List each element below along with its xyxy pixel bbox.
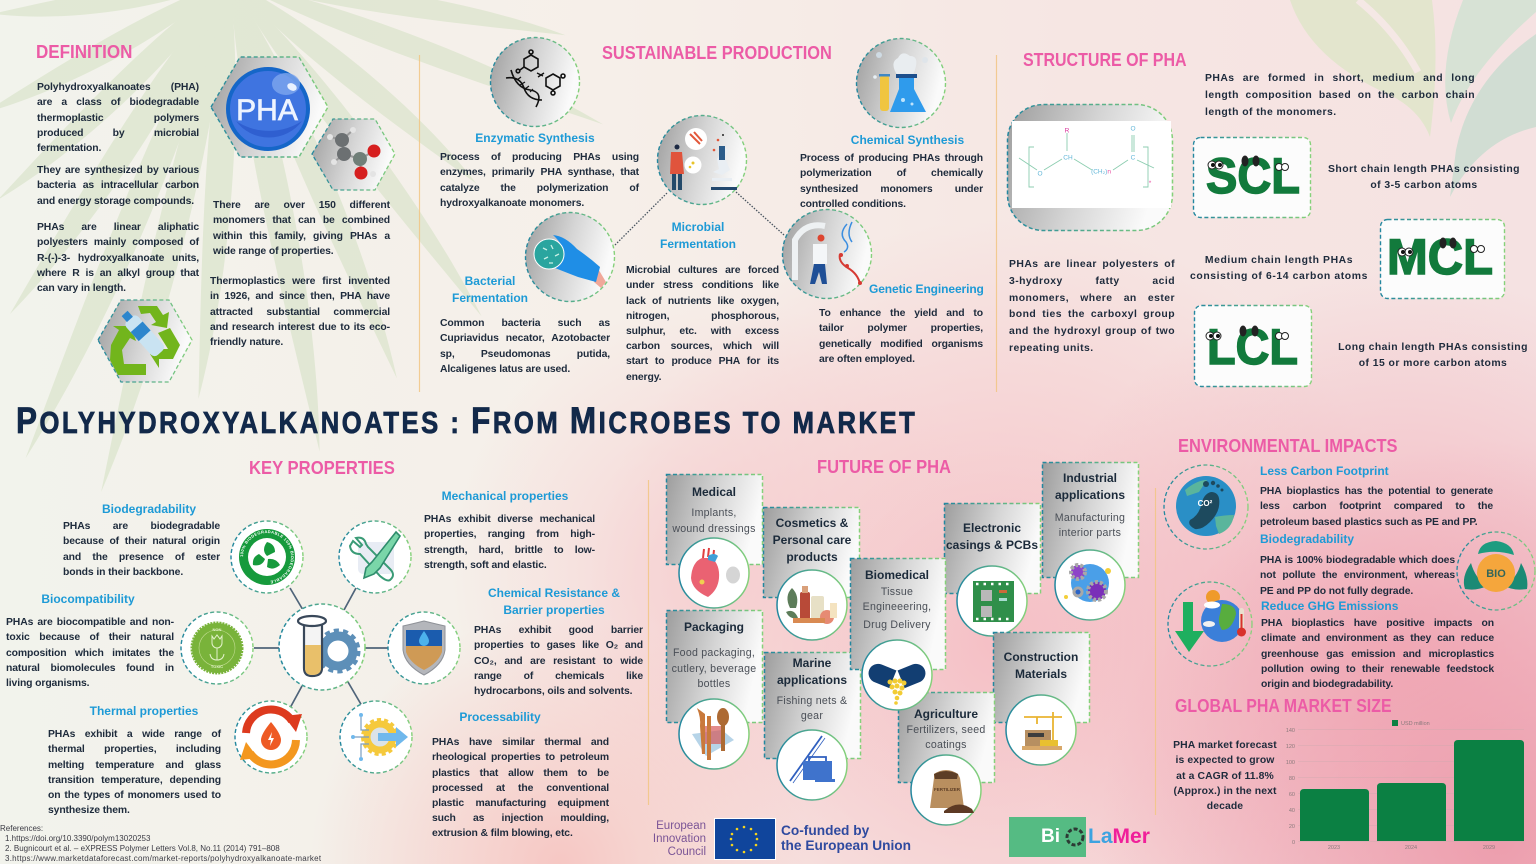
- card: MCL: [1380, 220, 1504, 298]
- card: SCL: [1194, 138, 1310, 218]
- text: genetic engineering: tailor polymer properties,: [819, 323, 983, 334]
- card: marine: gear: [801, 710, 823, 722]
- text: genetic engineering: [819, 308, 983, 365]
- text: definition paragraph 2: [37, 165, 199, 207]
- card: industrial: Manufacturing: [1055, 512, 1125, 524]
- card: construction: Materials: [1015, 667, 1067, 681]
- text: thermal properties: on the types of monomers used to: [48, 790, 221, 801]
- text: thermoplastics history: attracted substantial commercial: [210, 307, 390, 318]
- references: 2. Bugnicourt et al. – eXPRESS Polymer Letters Vol.8, No.11 (2014) 791–808: [5, 844, 280, 853]
- text: enzymatic synthesis: [440, 152, 640, 209]
- card: biomedical: Tissue: [881, 586, 913, 598]
- text: linear polyesters: repeating units.: [1009, 343, 1094, 354]
- text: linear polyesters: PHAs are linear polyesters of: [1009, 259, 1175, 270]
- subheading: enzymatic synthesis: Enzymatic Synthesis: [475, 131, 595, 145]
- card: construction: [994, 632, 1090, 765]
- text: linear polyesters: [1009, 259, 1175, 354]
- text: less carbon footprint: [1260, 486, 1493, 528]
- card: packaging: cutlery, beverage: [672, 663, 756, 675]
- text: definition paragraph 1: [37, 82, 199, 154]
- logo: BioLaMer: Bi: [1041, 826, 1060, 847]
- icon: bacterial fermentation: [526, 212, 614, 302]
- text: LCL description: of 15 or more carbon atoms: [1359, 358, 1507, 369]
- text: microbial fermentation: Microbial cultures are forced: [626, 265, 779, 276]
- icon: carbon footprint: CO²: [1198, 499, 1213, 508]
- text: processability: processed at the conventional: [432, 783, 609, 794]
- text: definition paragraph 3: [37, 222, 200, 294]
- text: market forecast: is expected to grow: [1176, 755, 1274, 766]
- text: MCL description: Medium chain length PHAs: [1205, 255, 1353, 266]
- text: thermoplastics history: in 1926, and since then, PHA have: [210, 291, 390, 302]
- text: less carbon footprint: petroleum based plastics such as PE and PP.: [1260, 517, 1478, 528]
- logo: BioLaMer: [1009, 817, 1154, 857]
- bar chart: 140: [1286, 728, 1295, 734]
- text: biocompatibility: composition which imitates the: [6, 648, 174, 659]
- subheading: biocompatibility: Biocompatibility: [41, 592, 135, 606]
- icon: enzymatic synthesis: [490, 38, 580, 126]
- text: thermal properties: thermal properties, including: [48, 744, 221, 755]
- subheading: microbial fermentation: Microbial: [672, 220, 724, 234]
- card: construction: Construction: [1004, 650, 1078, 664]
- icon: PHA hexagon: [211, 57, 328, 157]
- heading: future of PHA: FUTURE OF PHA: [817, 456, 951, 477]
- text: thermal properties: [48, 729, 222, 816]
- card: agriculture: [898, 692, 994, 825]
- diagram: PHA chemical structure: O: [1130, 126, 1136, 132]
- text: processability: PHAs have similar thermal and: [432, 737, 609, 748]
- text: definition paragraph 3: R-(-)-3- hydroxyalkanoate units,: [37, 253, 199, 264]
- text: mechanical properties: strength, hard, brittle to low-: [424, 545, 595, 556]
- bar chart: USD million: [1401, 721, 1430, 727]
- text: thermoplastics history: friendly nature.: [210, 337, 283, 348]
- card: electronic: [944, 504, 1040, 636]
- diagram: PHA chemical structure: [1008, 104, 1172, 230]
- text: chemical resistance: hydrocarbons, oils and solvents.: [474, 686, 632, 697]
- diagram: PHA chemical structure: *: [1149, 180, 1152, 187]
- bar chart: 60: [1289, 792, 1295, 798]
- icon: processability gear: [340, 701, 412, 773]
- icon: central hub: [279, 604, 365, 690]
- text: reduce GHG emissions: origin and biodegradability.: [1261, 679, 1393, 690]
- text: chemical synthesis: [800, 153, 984, 210]
- text: biodegradability: [63, 521, 220, 578]
- background: palm leaf: [0, 0, 610, 498]
- text: monomers: within this family, giving PHAs a: [213, 231, 390, 242]
- card: industrial: [1042, 462, 1138, 620]
- icon: microbial fermentation: [658, 116, 746, 204]
- logo: co-funded text: [781, 823, 916, 853]
- text: chain length intro: length composition based on the carbon chain: [1205, 90, 1475, 101]
- text: genetic engineering: genetically modified organisms: [819, 339, 983, 350]
- text: market forecast: at a CAGR of 11.8%: [1176, 771, 1274, 782]
- text: market forecast: (Approx.) in the next: [1173, 786, 1277, 797]
- text: linear polyesters: and the hydroxyl group of two: [1009, 326, 1175, 337]
- panel: environmental impacts: [1163, 435, 1536, 690]
- bar chart: 20: [1289, 824, 1295, 830]
- subheading: chemical synthesis: Chemical Synthesis: [851, 133, 964, 147]
- card: agriculture: FERTILIZER: [934, 787, 961, 792]
- text: microbial fermentation: start to produce PHA for its: [626, 356, 779, 367]
- text: bacterial fermentation: Alcaligenes latus are used.: [440, 364, 570, 375]
- text: bacterial fermentation: Common bacteria such as: [440, 318, 610, 329]
- text: mechanical properties: properties, ranging from high-: [424, 529, 595, 540]
- text: thermoplastics history: [210, 276, 390, 348]
- subheading: microbial fermentation: Fermentation: [660, 236, 736, 250]
- text: thermoplastics history: Thermoplastics were first invented: [210, 276, 390, 287]
- card: LCL: LCL: [1207, 319, 1298, 375]
- heading: global market: GLOBAL PHA MARKET SIZE: [1175, 695, 1392, 716]
- references: 1.https://doi.org/10.3390/polym13020253: [5, 834, 150, 843]
- logo: European Innovation Council: [653, 820, 706, 858]
- icon: carbon footprint: [1164, 465, 1248, 549]
- text: market forecast: [1173, 740, 1277, 812]
- text: processability: such as injection moulding,: [432, 813, 609, 824]
- text: genetic engineering: To enhance the yield and to: [819, 308, 983, 319]
- text: chemical resistance: CO₂, and are resistant to wide: [474, 656, 643, 667]
- bar chart: [1286, 720, 1524, 851]
- text: definition paragraph 1: produced by microbial: [37, 128, 199, 139]
- text: biocompatibility: natural biomolecules found in: [6, 663, 174, 674]
- card: agriculture: coatings: [925, 739, 967, 751]
- icon: bio leaves: BIO: [1486, 568, 1506, 580]
- text: chemical resistance: [474, 625, 643, 697]
- panel: structure of PHA: [1006, 49, 1528, 388]
- text: linear polyesters: bond ties the carboxyl group: [1009, 309, 1175, 320]
- subheading: genetic engineering: Genetic Engineering: [869, 282, 984, 296]
- text: SCL description: Short chain length PHAs consisting: [1328, 164, 1520, 175]
- text: definition paragraph 1: Polyhydroxyalkanoates (PHA): [37, 82, 199, 93]
- text: mechanical properties: strength, soft and elastic.: [424, 560, 547, 571]
- bar chart: 120: [1286, 744, 1295, 750]
- connector: bacterial to microbial: [615, 192, 668, 245]
- subheading: bacterial fermentation: Bacterial: [465, 274, 515, 288]
- icon: GHG reduction: [1168, 582, 1252, 666]
- text: monomers: wide range of properties.: [213, 246, 334, 257]
- icon: wrench and screwdriver: [339, 521, 411, 593]
- icon: biodegradable badge: 100% BIODEGRADABLE 100% BIODEGRADABLE: [240, 530, 294, 584]
- text: market forecast: PHA market forecast: [1173, 740, 1277, 751]
- subheading: chemical resistance: Barrier properties: [503, 602, 605, 616]
- heading: sustainable production: SUSTAINABLE PRODUCTION: [602, 42, 832, 63]
- subheading: mechanical properties: Mechanical properties: [442, 489, 568, 503]
- panel: global PHA market size: [1173, 695, 1524, 851]
- text: enzymatic synthesis: catalyze the polymerization of: [440, 183, 639, 194]
- card: packaging: Packaging: [684, 620, 744, 634]
- subheading: bacterial fermentation: Fermentation: [452, 290, 528, 304]
- subheading: biodegradability: Biodegradability: [102, 502, 196, 516]
- text: MCL description: [1190, 255, 1368, 282]
- card: marine: Fishing nets &: [777, 695, 847, 707]
- icon: PHA hexagon: PHA: [236, 94, 298, 127]
- text: thermal properties: melting temperature and glass: [48, 760, 221, 771]
- references: References:: [0, 824, 43, 833]
- text: definition paragraph 1: thermoplastic polymers: [37, 113, 199, 124]
- text: monomers: [213, 200, 390, 257]
- logo: co-funded text: Co-funded by: [781, 823, 869, 838]
- text: biodegradability benefit: not pollute the environment, whereas: [1260, 570, 1455, 581]
- text: biocompatibility: toxic because of their natural: [6, 632, 174, 643]
- diagram: PHA chemical structure: (CH₂)n: [1091, 168, 1111, 176]
- text: definition paragraph 1: are a class of biodegradable: [37, 97, 199, 108]
- icon: thermal cycle: [235, 701, 307, 773]
- text: reduce GHG emissions: climate and environment as they can reduce: [1261, 633, 1494, 644]
- text: processability: [432, 737, 609, 839]
- text: chemical resistance: properties to gases like O₂ and: [474, 640, 643, 651]
- text: definition paragraph 1: fermentation.: [37, 143, 101, 154]
- logo: EU flag: [714, 818, 776, 860]
- dividers: [420, 55, 1156, 815]
- bar chart: 2024: [1405, 845, 1417, 851]
- card: marine: Marine: [793, 656, 832, 670]
- text: biodegradability benefit: PHA is 100% biodegradable which does: [1260, 555, 1455, 566]
- card: LCL: [1194, 306, 1312, 386]
- card: industrial: interior parts: [1059, 527, 1121, 539]
- text: MCL description: consisting of 6-14 carbon atoms: [1190, 271, 1368, 282]
- bar chart: 2029: [1483, 845, 1495, 851]
- subheading: reduce GHG emissions: Reduce GHG Emissions: [1261, 599, 1398, 613]
- card: biomedical: Engineeering,: [863, 601, 931, 613]
- text: market forecast: decade: [1207, 801, 1243, 812]
- text: definition paragraph 3: where R is an alkyl group that: [37, 268, 199, 279]
- text: biodegradability: because of their natural origin: [63, 536, 220, 547]
- text: microbial fermentation: energy.: [626, 372, 661, 383]
- panel: future of PHA: [666, 456, 1140, 826]
- bar chart: 80: [1289, 776, 1295, 782]
- text: chemical synthesis: synthesized monomers under: [800, 184, 983, 195]
- text: LCL description: [1338, 342, 1528, 369]
- heading: environmental impacts: ENVIRONMENTAL IMPACTS: [1178, 435, 1398, 456]
- text: bacterial fermentation: Cupriavidus necator, Azotobacter: [440, 333, 610, 344]
- heading: definition: DEFINITION: [36, 41, 132, 62]
- text: biodegradability benefit: [1260, 555, 1455, 597]
- text: SCL description: [1328, 164, 1520, 191]
- bar chart: 2023: [1328, 845, 1340, 851]
- text: thermal properties: synthesize them.: [48, 805, 130, 816]
- card: medical: [666, 474, 762, 608]
- text: chain length intro: PHAs are formed in short, medium and long: [1205, 73, 1475, 84]
- text: thermal properties: PHAs exhibit a wide range of: [48, 729, 221, 740]
- subheading: processability: Processability: [459, 710, 541, 724]
- card: marine: applications: [777, 673, 847, 687]
- card: industrial: Industrial: [1063, 471, 1117, 485]
- title: POLYHYDROXYALKANOATES : FROM MICROBES TO MARKET: [16, 401, 915, 442]
- text: biocompatibility: [6, 617, 174, 689]
- background: corner leaves: [1290, 0, 1536, 197]
- card: electronic: casings & PCBs: [946, 538, 1038, 552]
- text: monomers: monomers that can be combined: [213, 215, 390, 226]
- card: biomedical: [850, 558, 946, 710]
- panel: sustainable production: [440, 36, 984, 383]
- subheading: biodegradability: Biodegradability: [1260, 532, 1354, 546]
- text: microbial fermentation: lack of nutrients like oxygen,: [626, 296, 779, 307]
- text: microbial fermentation: nitrogen, phosphorous,: [626, 311, 779, 322]
- icon: non toxic badge: [181, 612, 253, 684]
- text: chain length intro: length of the monomers.: [1205, 107, 1337, 118]
- subheading: chemical resistance: Chemical Resistance &: [488, 586, 620, 600]
- text: definition paragraph 2: They are synthesized by various: [37, 165, 199, 176]
- text: definition paragraph 3: can vary in length.: [37, 283, 126, 294]
- card: medical: wound dressings: [671, 523, 756, 535]
- text: biodegradability benefit: PE and PP do not fully degrade.: [1260, 586, 1413, 597]
- text: chemical resistance: range of chemicals like: [474, 671, 643, 682]
- card: cosmetics: products: [786, 550, 838, 564]
- text: linear polyesters: monomers, where an ester: [1009, 293, 1175, 304]
- icon: molecule hexagon: [312, 119, 395, 190]
- text: enzymatic synthesis: hydroxyalkanoate monomers.: [440, 198, 584, 209]
- text: chemical synthesis: controlled conditions.: [800, 199, 906, 210]
- text: biocompatibility: PHAs are biocompatible and non-: [6, 617, 174, 628]
- subheading: less carbon footprint: Less Carbon Footprint: [1260, 464, 1389, 478]
- text: processability: rheological properties to petroleum: [432, 752, 609, 763]
- text: enzymatic synthesis: Process of producing PHAs using: [440, 152, 639, 163]
- subheading: thermal properties: Thermal properties: [90, 704, 198, 718]
- text: thermoplastics history: and research interest due to its eco-: [210, 322, 390, 333]
- text: microbial fermentation: carbon sources, which will: [626, 341, 779, 352]
- card: cosmetics: Cosmetics &: [776, 516, 849, 530]
- references: [0, 824, 322, 863]
- text: microbial fermentation: sulphur, etc. with excess: [626, 326, 779, 337]
- text: mechanical properties: PHAs exhibit diverse mechanical: [424, 514, 595, 525]
- card: cosmetics: Personal care: [773, 533, 852, 547]
- logo: European Innovation Council: Council: [668, 846, 706, 858]
- text: definition paragraph 3: PHAs are linear aliphatic: [37, 222, 199, 233]
- text: less carbon footprint: less carbon footprint compared to the: [1260, 501, 1493, 512]
- subheading: bacterial fermentation: [452, 274, 528, 304]
- diagram: PHA chemical structure: CH: [1063, 154, 1073, 162]
- icon: chemical synthesis: [856, 38, 946, 128]
- text: biodegradability: bonds in their backbone.: [63, 567, 183, 578]
- icon: non toxic badge: NON: [213, 627, 222, 632]
- connector: microbial to genetic: [736, 192, 784, 235]
- card: industrial: applications: [1055, 488, 1125, 502]
- spokes: [254, 588, 388, 708]
- references: 3.https://www.marketdataforecast.com/market-reports/polyhydroxyalkanoate-market: [5, 854, 321, 863]
- card: packaging: Food packaging,: [673, 647, 755, 659]
- card: marine: [764, 652, 860, 800]
- subheading: chemical resistance: [488, 586, 620, 616]
- icon: bio leaves: [1457, 532, 1535, 610]
- bar chart: 100: [1286, 760, 1295, 766]
- card: MCL: MCL: [1387, 229, 1493, 285]
- panel: definition: [36, 41, 396, 383]
- text: chemical resistance: PHAs exhibit good barrier: [474, 625, 643, 636]
- text: SCL description: of 3-5 carbon atoms: [1370, 180, 1478, 191]
- text: definition paragraph 2: bacteria as intracellular carbon: [37, 180, 199, 191]
- icon: recycling hexagon: [98, 300, 192, 382]
- card: packaging: [666, 610, 762, 769]
- text: processability: plastic manufacturing equipment: [432, 798, 609, 809]
- text: monomers: There are over 150 different: [213, 200, 390, 211]
- card: cosmetics: [764, 508, 860, 640]
- bar chart: 40: [1289, 808, 1295, 814]
- text: biodegradability: PHAs are biodegradable: [63, 521, 220, 532]
- text: microbial fermentation: [626, 265, 779, 383]
- text: biocompatibility: living organisms.: [6, 678, 89, 689]
- text: definition paragraph 3: polyesters mainly composed of: [37, 237, 199, 248]
- card: agriculture: Agriculture: [914, 707, 978, 721]
- heading: structure of PHA: STRUCTURE OF PHA: [1023, 49, 1187, 70]
- logo: co-funded text: the European Union: [781, 838, 911, 853]
- diagram: PHA chemical structure: O: [1037, 170, 1043, 178]
- icon: non toxic badge: TOXIC: [211, 664, 223, 669]
- text: definition paragraph 2: and energy storage compounds.: [37, 196, 194, 207]
- text: linear polyesters: 3-hydroxy fatty acid: [1009, 276, 1175, 287]
- diagram: PHA chemical structure: C: [1131, 154, 1136, 162]
- text: chemical synthesis: Process of producing PHAs through: [800, 153, 983, 164]
- card: packaging: bottles: [698, 678, 730, 690]
- text: chemical synthesis: polymerization of chemically: [800, 168, 983, 179]
- card: biomedical: Biomedical: [865, 568, 929, 582]
- logo: European Innovation Council: European: [656, 820, 706, 832]
- logo: BioLaMer: LaMer: [1088, 825, 1150, 848]
- diagram: PHA chemical structure: R: [1065, 128, 1070, 134]
- text: enzymatic synthesis: enzymes, primarily PHA synthase, that: [440, 167, 639, 178]
- panel: key properties: [6, 457, 643, 839]
- subheading: microbial fermentation: [660, 220, 736, 250]
- text: LCL description: Long chain length PHAs consisting: [1338, 342, 1528, 353]
- card: electronic: Electronic: [963, 521, 1021, 535]
- card: medical: Implants,: [691, 507, 737, 519]
- text: less carbon footprint: PHA bioplastics has the potential to generate: [1260, 486, 1493, 497]
- text: reduce GHG emissions: PHA bioplastics have positive impacts on: [1261, 618, 1494, 629]
- text: bacterial fermentation: sp, Pseudomonas putida,: [440, 349, 610, 360]
- icon: genetic engineering: [782, 210, 872, 298]
- text: thermal properties: transition temperature, depending: [48, 775, 221, 786]
- text: chain length intro: [1205, 73, 1475, 118]
- card: medical: Medical: [692, 485, 736, 499]
- text: processability: plastics that allow them to be: [432, 768, 609, 779]
- card: agriculture: Fertilizers, seed: [906, 724, 986, 736]
- logo: European Innovation Council: Innovation: [653, 833, 706, 845]
- text: genetic engineering: are often employed.: [819, 354, 915, 365]
- text: mechanical properties: [424, 514, 595, 571]
- text: reduce GHG emissions: pollution owing to their renewable feedstock: [1261, 664, 1494, 675]
- card: SCL: SCL: [1206, 148, 1300, 204]
- icon: barrier shield: [388, 612, 460, 684]
- card: biomedical: Drug Delivery: [863, 619, 931, 631]
- text: microbial fermentation: under stress conditions like: [626, 280, 779, 291]
- bar chart: 0: [1292, 840, 1295, 846]
- text: reduce GHG emissions: [1261, 618, 1494, 690]
- icon: biodegradable badge: [230, 520, 304, 594]
- text: biodegradability: and the presence of ester: [63, 552, 220, 563]
- heading: key properties: KEY PROPERTIES: [249, 457, 395, 478]
- text: reduce GHG emissions: greenhouse gas emission and microplastics: [1261, 649, 1494, 660]
- text: bacterial fermentation: [440, 318, 610, 375]
- text: processability: extrusion & film blowing, etc.: [432, 828, 573, 839]
